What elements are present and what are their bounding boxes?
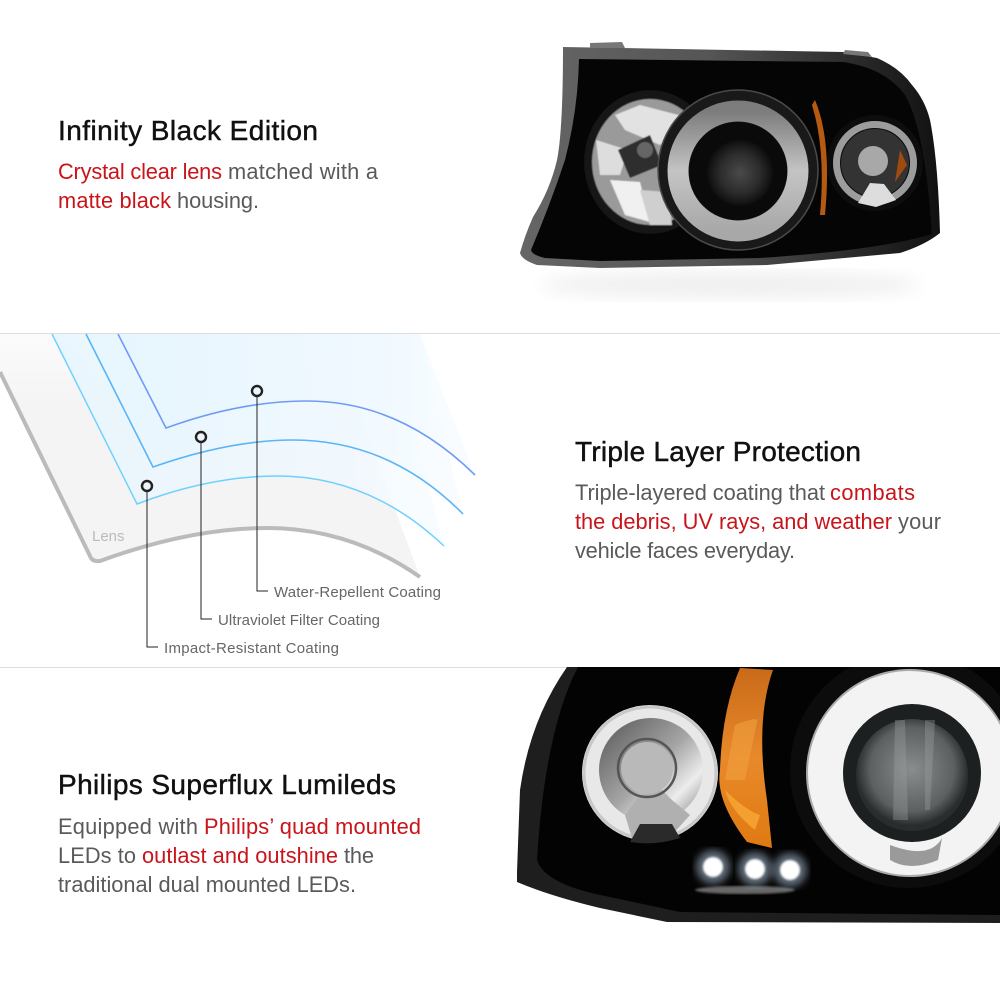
text block: lens description: matte black [58,188,171,213]
text block: lens description [58,159,379,213]
text block: LED description [58,814,421,897]
text block: coating description: combats [830,480,915,505]
text block: LED description: Philips’ quad mounted [204,814,421,839]
text block: LED description: outlast and outshine [142,843,338,868]
lens coating diagram [0,334,475,657]
lens layer [0,334,420,577]
text block: coating description: vehicle faces everyday. [575,538,795,563]
headlight reflection [540,271,920,299]
image: black headlight assembly [520,42,940,299]
text block: coating description: the debris, UV rays, and weather [575,509,892,534]
callout: ultraviolet filter coating [196,432,380,629]
small lamp [827,115,923,211]
small projector lamp [582,705,718,843]
text block: coating description: your [898,509,941,534]
amber marker [812,100,827,215]
heading: Infinity Black Edition: Infinity Black Edition [58,115,318,146]
text block: lens description: housing. [177,188,259,213]
text block: LED description: LEDs to [58,843,136,868]
large projector lamp [790,652,1000,888]
lens layer: Lens [92,528,125,545]
panel: Infinity Black Edition [58,42,940,299]
divider bottom [0,667,1000,668]
panel: Philips Superflux Lumileds [58,652,1000,923]
text block: lens description: matched with a [228,159,379,184]
text block: LED description: Equipped with [58,814,198,839]
text block: coating description [575,480,941,563]
amber side marker [719,668,773,848]
panel: Triple Layer Protection [0,334,941,657]
heading: Triple Layer Protection: Triple Layer Protection [575,436,861,467]
text block: lens description: Crystal clear lens [58,159,222,184]
text block: LED description: the [344,843,374,868]
callout: impact-resistant coating [142,481,339,657]
coating layers [52,334,475,546]
callout: water-repellent coating [252,386,441,601]
text block: coating description: Triple-layered coating that [575,480,825,505]
heading: Philips Superflux Lumileds: Philips Superflux Lumileds [58,769,396,800]
LEDs [695,850,807,894]
text block: LED description: traditional dual mounted LEDs. [58,872,356,897]
left reflector [584,90,716,234]
image: lit headlight close-up [517,652,1000,923]
callout: ultraviolet filter coating: Ultraviolet Filter Coating [218,612,380,629]
divider top [0,333,1000,334]
projector lamp [658,90,818,250]
callout: impact-resistant coating: Impact-Resistant Coating [164,640,339,657]
callout: water-repellent coating: Water-Repellent Coating [274,584,441,601]
